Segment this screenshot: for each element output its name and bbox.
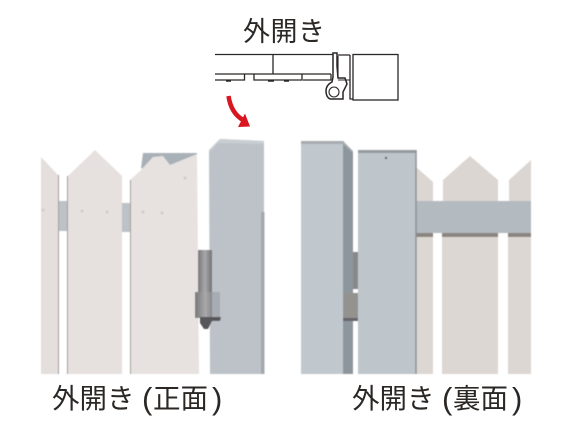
label: rear view: 外開き (352, 383, 434, 414)
label: rear view: ( (442, 381, 453, 416)
picket 3 (130, 154, 199, 374)
gate post (301, 141, 344, 374)
picket 1 (41, 157, 58, 374)
rail (412, 201, 531, 233)
photo: rear view of gate (301, 141, 531, 374)
post (209, 139, 264, 374)
hinge (198, 250, 212, 293)
label: rear view: ) (512, 381, 522, 416)
steel stile top behind picket (141, 153, 197, 175)
hinge section (326, 53, 347, 99)
label: front view: ) (212, 381, 222, 416)
label: front view: 外開き (52, 383, 134, 414)
pickets below rail (416, 232, 433, 374)
pickets above rail (416, 167, 433, 204)
icon: red opening arrow (228, 96, 250, 127)
label: front view: ( (142, 381, 153, 416)
plan diagram: outward-opening hinge (215, 53, 398, 100)
rail sections behind pickets (58, 201, 131, 232)
photo: front view of gate (41, 139, 264, 374)
gate stile (358, 150, 416, 374)
title: 外開き (243, 17, 325, 47)
picket 2 (68, 150, 122, 374)
hinge (353, 252, 359, 289)
label: front view: 正面 (153, 383, 208, 414)
label: rear view: 裏面 (453, 383, 508, 414)
picket nail marks (42, 176, 186, 214)
post section (353, 54, 398, 100)
